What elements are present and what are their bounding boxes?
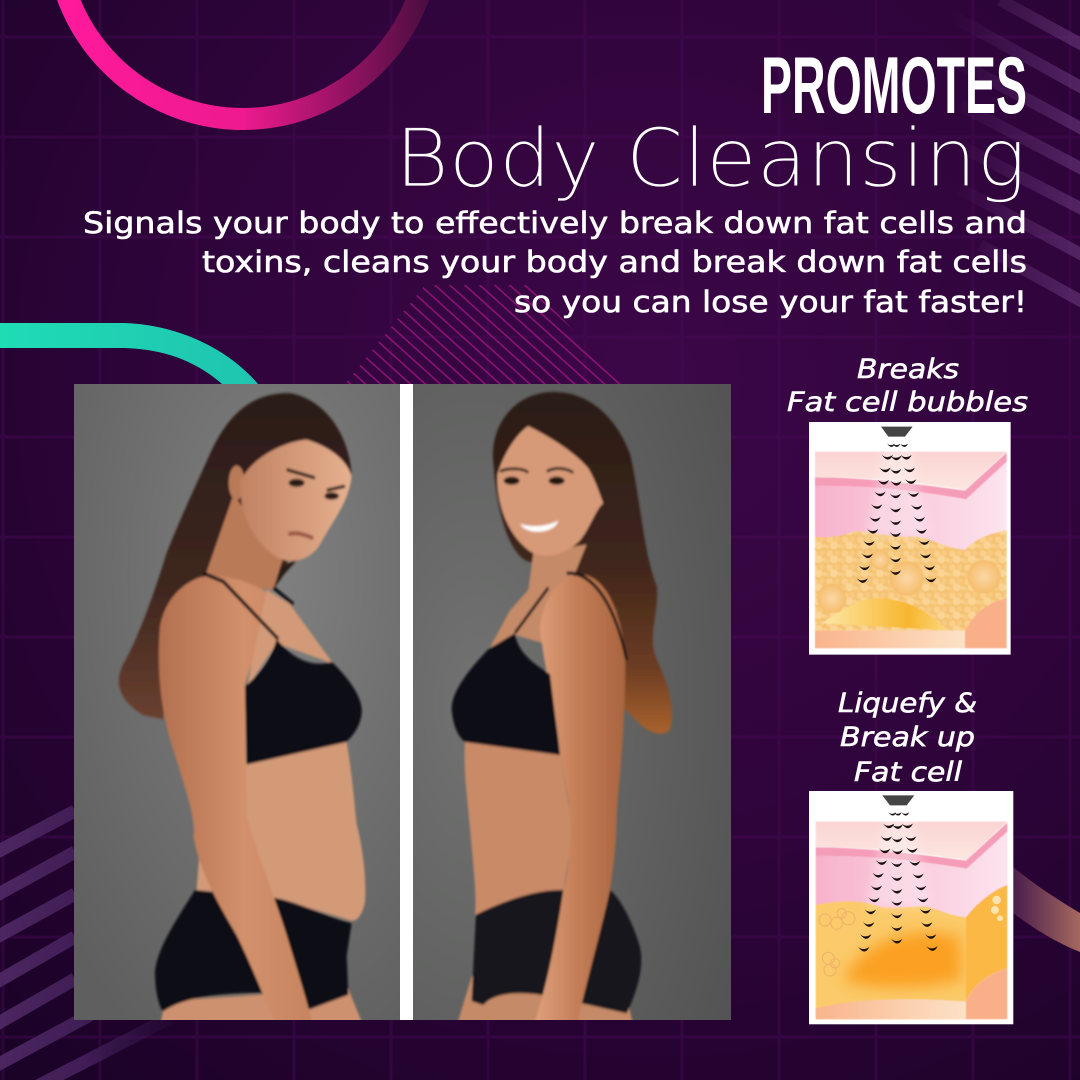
caption: Liquefy & Break up Fat cell: Fat cell [854, 757, 963, 788]
ear [229, 466, 245, 500]
decorative stripes: top right [950, 0, 1080, 306]
photo: after [413, 384, 731, 1026]
legs [160, 989, 363, 1026]
neck [203, 495, 283, 590]
neck and chest [490, 545, 587, 647]
description text [83, 206, 1027, 319]
torso [197, 742, 365, 921]
torso [465, 742, 573, 915]
decorative stripes: bottom left [0, 811, 170, 1080]
description text: Signals your body to effectively break down fat cells and [83, 206, 1027, 240]
chest [247, 590, 333, 688]
caption: Liquefy & Break up Fat cell: Liquefy & [838, 688, 977, 719]
face [240, 440, 352, 561]
description text: so you can lose your fat faster! [514, 285, 1027, 319]
photo: before [74, 384, 400, 1026]
briefs [155, 890, 352, 1011]
caption: Breaks Fat cell bubbles: Fat cell bubbles [787, 387, 1028, 418]
pink arc [56, 0, 430, 119]
caption: Liquefy & Break up Fat cell [838, 688, 977, 788]
smile [520, 521, 558, 532]
caption: Breaks Fat cell bubbles: Breaks [857, 354, 959, 385]
diagram: fat cell bubbles [809, 422, 1011, 655]
teal arc [0, 323, 258, 384]
hair [119, 393, 352, 719]
white divider [400, 384, 413, 1020]
hair under chin [274, 560, 296, 588]
bra [245, 639, 362, 765]
bra [452, 633, 560, 755]
hair [493, 392, 672, 734]
face [497, 426, 603, 556]
caption: Breaks Fat cell bubbles [787, 354, 1028, 418]
briefs [472, 890, 641, 1013]
diagram: liquefied fat [809, 791, 1013, 1024]
arm [533, 575, 625, 1026]
title: Body Cleansing: Body Cleansing [395, 112, 1026, 205]
caption: Liquefy & Break up Fat cell: Break up [840, 722, 975, 753]
description text: toxins, cleans your body and break down fat cells [202, 245, 1027, 279]
decorative hatch: centre [346, 285, 621, 384]
arm [159, 576, 313, 1026]
legs [457, 976, 633, 1026]
brown arc [1013, 867, 1080, 952]
